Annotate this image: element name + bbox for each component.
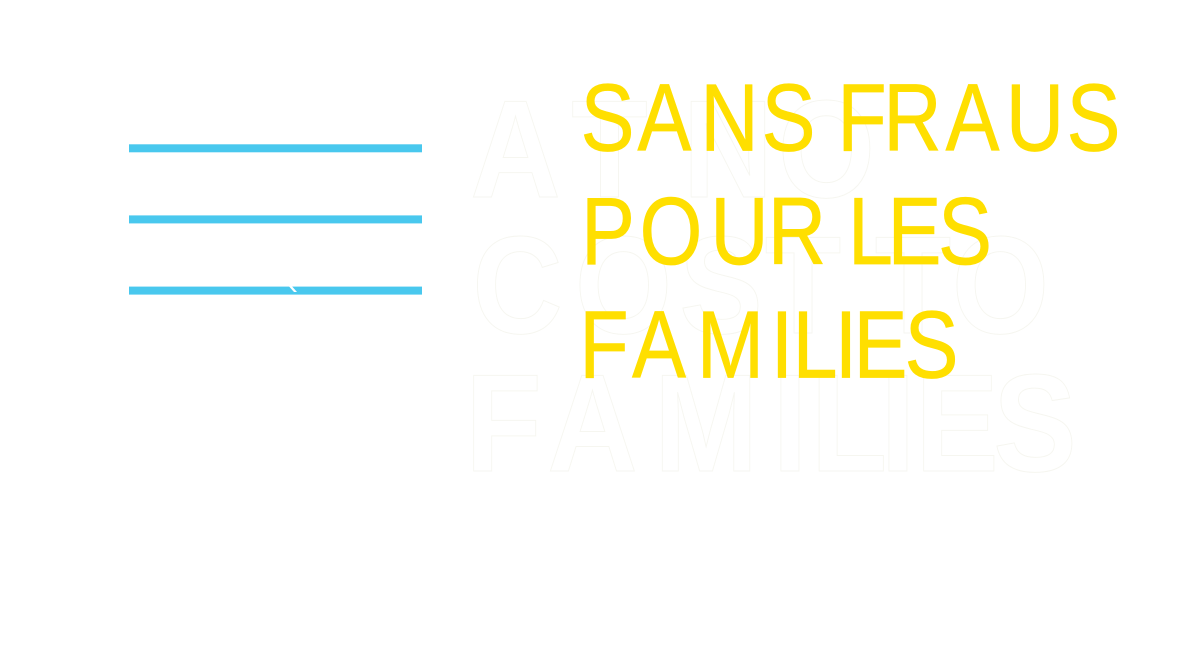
ghost line 1: AT NO (470, 72, 875, 227)
ghost line 2: COST TO (472, 208, 1049, 363)
heading line 3: FAMILIES (579, 291, 958, 398)
ghost line 3: FAMILIES (465, 346, 1077, 501)
blue rule 3 (129, 287, 422, 295)
yellow heading (579, 64, 1120, 398)
blue rule 1 (129, 144, 422, 152)
white tick over third rule (286, 283, 297, 292)
heading line 2: POUR LES (581, 177, 992, 285)
ghost heading: white text with faint outline (465, 72, 1077, 501)
blue rule 2 (129, 215, 422, 223)
heading line 1: SANS FRAUS (581, 64, 1120, 171)
blue rule group (129, 144, 422, 295)
